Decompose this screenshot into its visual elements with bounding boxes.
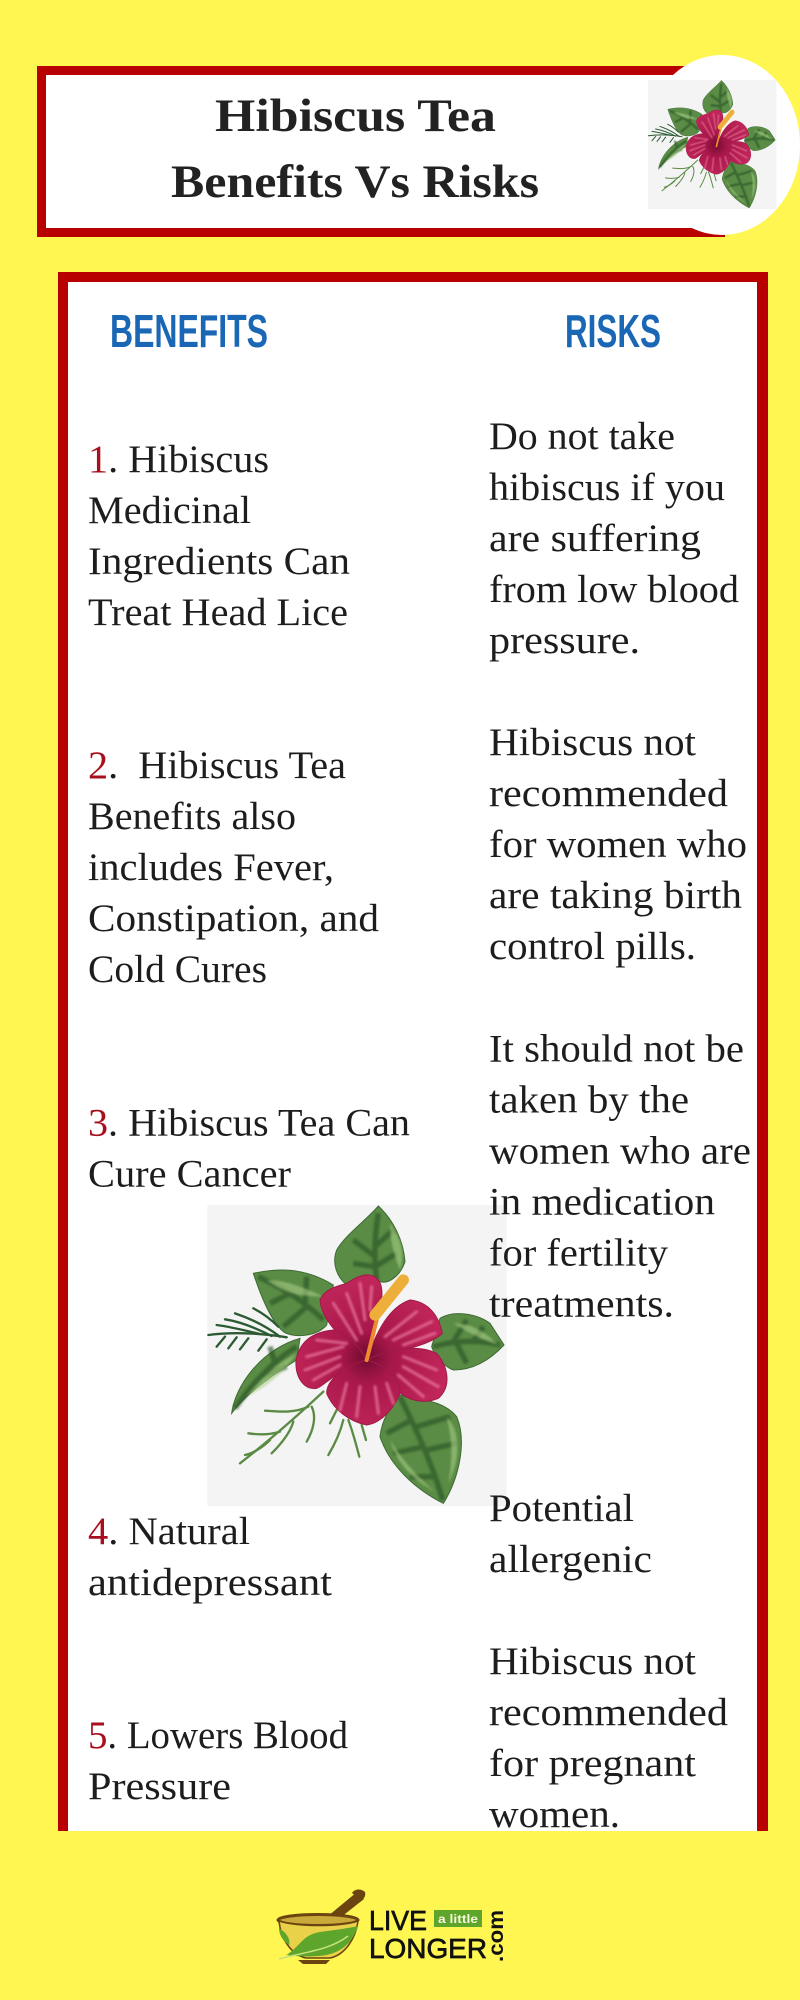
benefit 1: Medicinal — [88, 489, 251, 532]
risk 1: Do not take — [489, 415, 675, 458]
risk 3: It should not be — [489, 1028, 744, 1070]
icon: large hibiscus flower — [207, 1205, 507, 1506]
benefit 5: Pressure — [88, 1765, 231, 1808]
logo: Live a Little Longer — [278, 1890, 508, 1964]
rotated .com: .com — [485, 1910, 508, 1962]
risk 4: allergenic — [489, 1538, 652, 1581]
risk 2: control pills. — [489, 925, 696, 968]
title — [171, 90, 539, 208]
icon: mortar and pestle — [278, 1890, 365, 1964]
panel: benefits and risks — [58, 272, 768, 1836]
benefit 2 — [88, 744, 380, 991]
risk 5: women. — [489, 1793, 620, 1836]
benefit 3: 3. Hibiscus Tea Can — [88, 1102, 410, 1144]
benefit 1: 1. Hibiscus — [88, 438, 269, 481]
risk 2: for women who — [489, 823, 747, 866]
risk 3: treatments. — [489, 1283, 674, 1326]
risk 2: are taking birth — [489, 874, 742, 917]
benefit 1 — [88, 438, 350, 634]
risk 5: Hibiscus not — [489, 1640, 696, 1683]
risk 1: are suffering — [489, 517, 701, 560]
risk 1: pressure. — [489, 619, 640, 662]
heading: benefits: BENEFITS — [110, 305, 268, 357]
risk 4: Potential — [489, 1487, 634, 1530]
benefit 4: antidepressant — [88, 1561, 332, 1604]
risk 3: taken by the — [489, 1078, 689, 1122]
risk 5 — [489, 1640, 729, 1836]
risk 3 — [489, 1028, 751, 1326]
logo: Live a Little Longer: LONGER — [369, 1933, 487, 1964]
benefit 2: 2. Hibiscus Tea — [88, 744, 346, 787]
risk 3: women who are — [489, 1130, 751, 1173]
benefit 1: Treat Head Lice — [88, 591, 348, 634]
benefit 2: Benefits also — [88, 795, 296, 838]
benefit 5 — [88, 1714, 348, 1808]
risk 2: recommended — [489, 772, 729, 815]
icon: small hibiscus flower — [648, 80, 776, 209]
benefit 3 — [88, 1102, 410, 1196]
risk 1: hibiscus if you — [489, 466, 725, 509]
benefit 2: Cold Cures — [88, 948, 267, 991]
benefit 4 — [88, 1510, 332, 1604]
white circle behind small flower — [644, 55, 800, 235]
benefit 5: 5. Lowers Blood — [88, 1714, 348, 1757]
risk 1: from low blood — [489, 568, 740, 611]
benefit 3: Cure Cancer — [88, 1153, 291, 1196]
title: Benefits Vs Risks — [171, 156, 539, 208]
benefit 2: Constipation, and — [88, 897, 380, 940]
benefit 2: includes Fever, — [88, 846, 334, 889]
risk 3: for fertility — [489, 1232, 669, 1275]
heading: risks: RISKS — [565, 305, 661, 357]
risk 5: recommended — [489, 1691, 729, 1734]
risk 2: Hibiscus not — [489, 721, 696, 764]
risk 1 — [489, 415, 740, 662]
wordmark: LIVE — [369, 1905, 427, 1936]
risk 5: for pregnant — [489, 1742, 696, 1785]
benefit 1: Ingredients Can — [88, 540, 350, 583]
risk 4 — [489, 1487, 652, 1581]
title banner — [42, 70, 720, 232]
badge: a little: a little — [438, 1912, 478, 1926]
badge: a little — [434, 1910, 482, 1927]
risk 2 — [489, 721, 747, 968]
title: Hibiscus Tea — [215, 90, 496, 142]
risk 3: in medication — [489, 1181, 715, 1224]
benefit 4: 4. Natural — [88, 1510, 250, 1553]
